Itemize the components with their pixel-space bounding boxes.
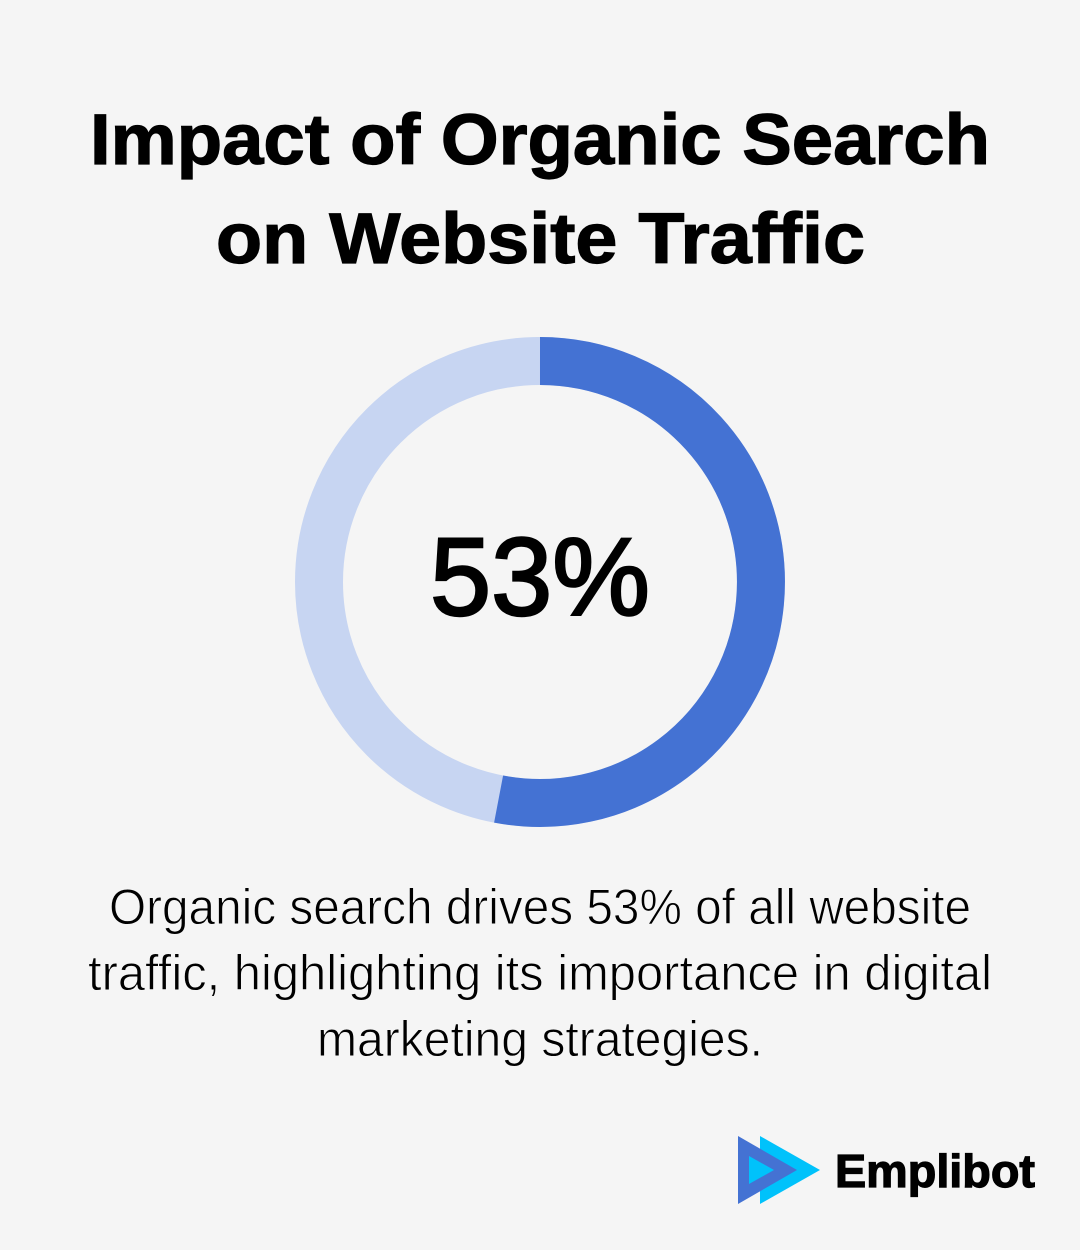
- logo wordmark: Emplibot: [835, 1145, 1035, 1197]
- icon: play triangles: [738, 1136, 820, 1204]
- title: Impact of Organic Search: [90, 101, 990, 180]
- donut track: [319, 361, 761, 803]
- Emplibot logo: [738, 1136, 1035, 1204]
- donut chart: 53%: [319, 361, 761, 803]
- description text: marketing strategies.: [317, 1011, 763, 1067]
- title: [90, 101, 990, 279]
- title: on Website Traffic: [216, 200, 865, 279]
- description text: [88, 879, 992, 1067]
- donut value arc: [499, 361, 761, 803]
- description text: traffic, highlighting its importance in digital: [88, 945, 992, 1001]
- donut value label: 53%: [430, 516, 650, 639]
- description text: Organic search drives 53% of all website: [109, 879, 971, 935]
